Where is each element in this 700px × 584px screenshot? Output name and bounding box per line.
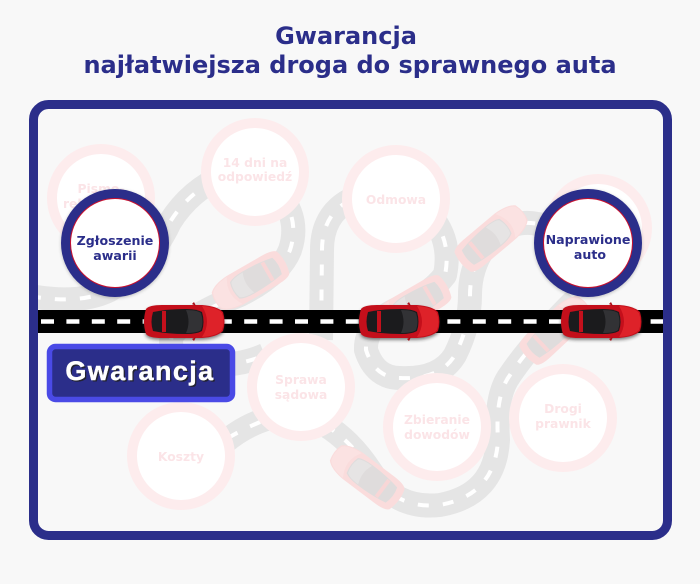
end circle: Naprawione auto: auto [574, 247, 606, 262]
faded step: Koszty: Koszty [158, 450, 204, 464]
start circle: Zgłoszenie awarii [61, 189, 169, 298]
faded step: Zbieranie dowodów: dowodów [404, 428, 470, 442]
title: Gwarancja [275, 22, 417, 50]
end circle: Naprawione auto [534, 189, 642, 298]
faded step: Koszty [132, 407, 230, 505]
faded cars [207, 199, 597, 514]
faded step: Drogi prawnik [514, 369, 612, 467]
faded step: Sprawa sądowa: Sprawa [275, 373, 327, 387]
title [83, 22, 617, 79]
red car 2 [359, 302, 440, 341]
faded step: Pismo reklamacja: Pismo- [78, 182, 124, 196]
faded step: 14 dni na odpowiedź: odpowiedź [218, 170, 292, 184]
red car 1 [144, 302, 224, 341]
faded step: Odmowa: Odmowa [366, 193, 426, 207]
start circle: Zgłoszenie awarii: awarii [93, 248, 137, 263]
faded step: Pismo reklamacja: reklamacja [63, 197, 139, 211]
faded step: Drogi prawnik: Drogi [544, 402, 582, 416]
label: Gwarancja: Gwarancja [67, 358, 216, 388]
faded winding road [30, 175, 575, 506]
faded step: Zbieranie dowodów [388, 378, 486, 476]
red car 3 [561, 302, 642, 341]
straight black road [38, 310, 663, 333]
start circle: Zgłoszenie awarii: Zgłoszenie [77, 233, 153, 248]
faded step: Zbieranie dowodów: Zbieranie [404, 413, 470, 427]
faded step: hidden circle at right [549, 179, 647, 277]
faded step: Sprawa sądowa: sądowa [275, 388, 327, 402]
panel: frame [34, 104, 668, 536]
faded step: 14 dni na odpowiedź [206, 123, 304, 221]
faded step: Odmowa [347, 150, 445, 248]
faded step: Pismo reklamacja [52, 149, 150, 247]
label: Gwarancja [50, 346, 232, 400]
faded step: Sprawa sądowa [252, 338, 350, 436]
faded step: Drogi prawnik: prawnik [535, 417, 592, 431]
end circle: Naprawione auto: Naprawione [546, 232, 630, 247]
label: Gwarancja: Gwarancja [65, 356, 215, 386]
title: najłatwiejsza droga do sprawnego auta [83, 51, 617, 79]
faded step: 14 dni na odpowiedź: 14 dni na [223, 156, 287, 170]
